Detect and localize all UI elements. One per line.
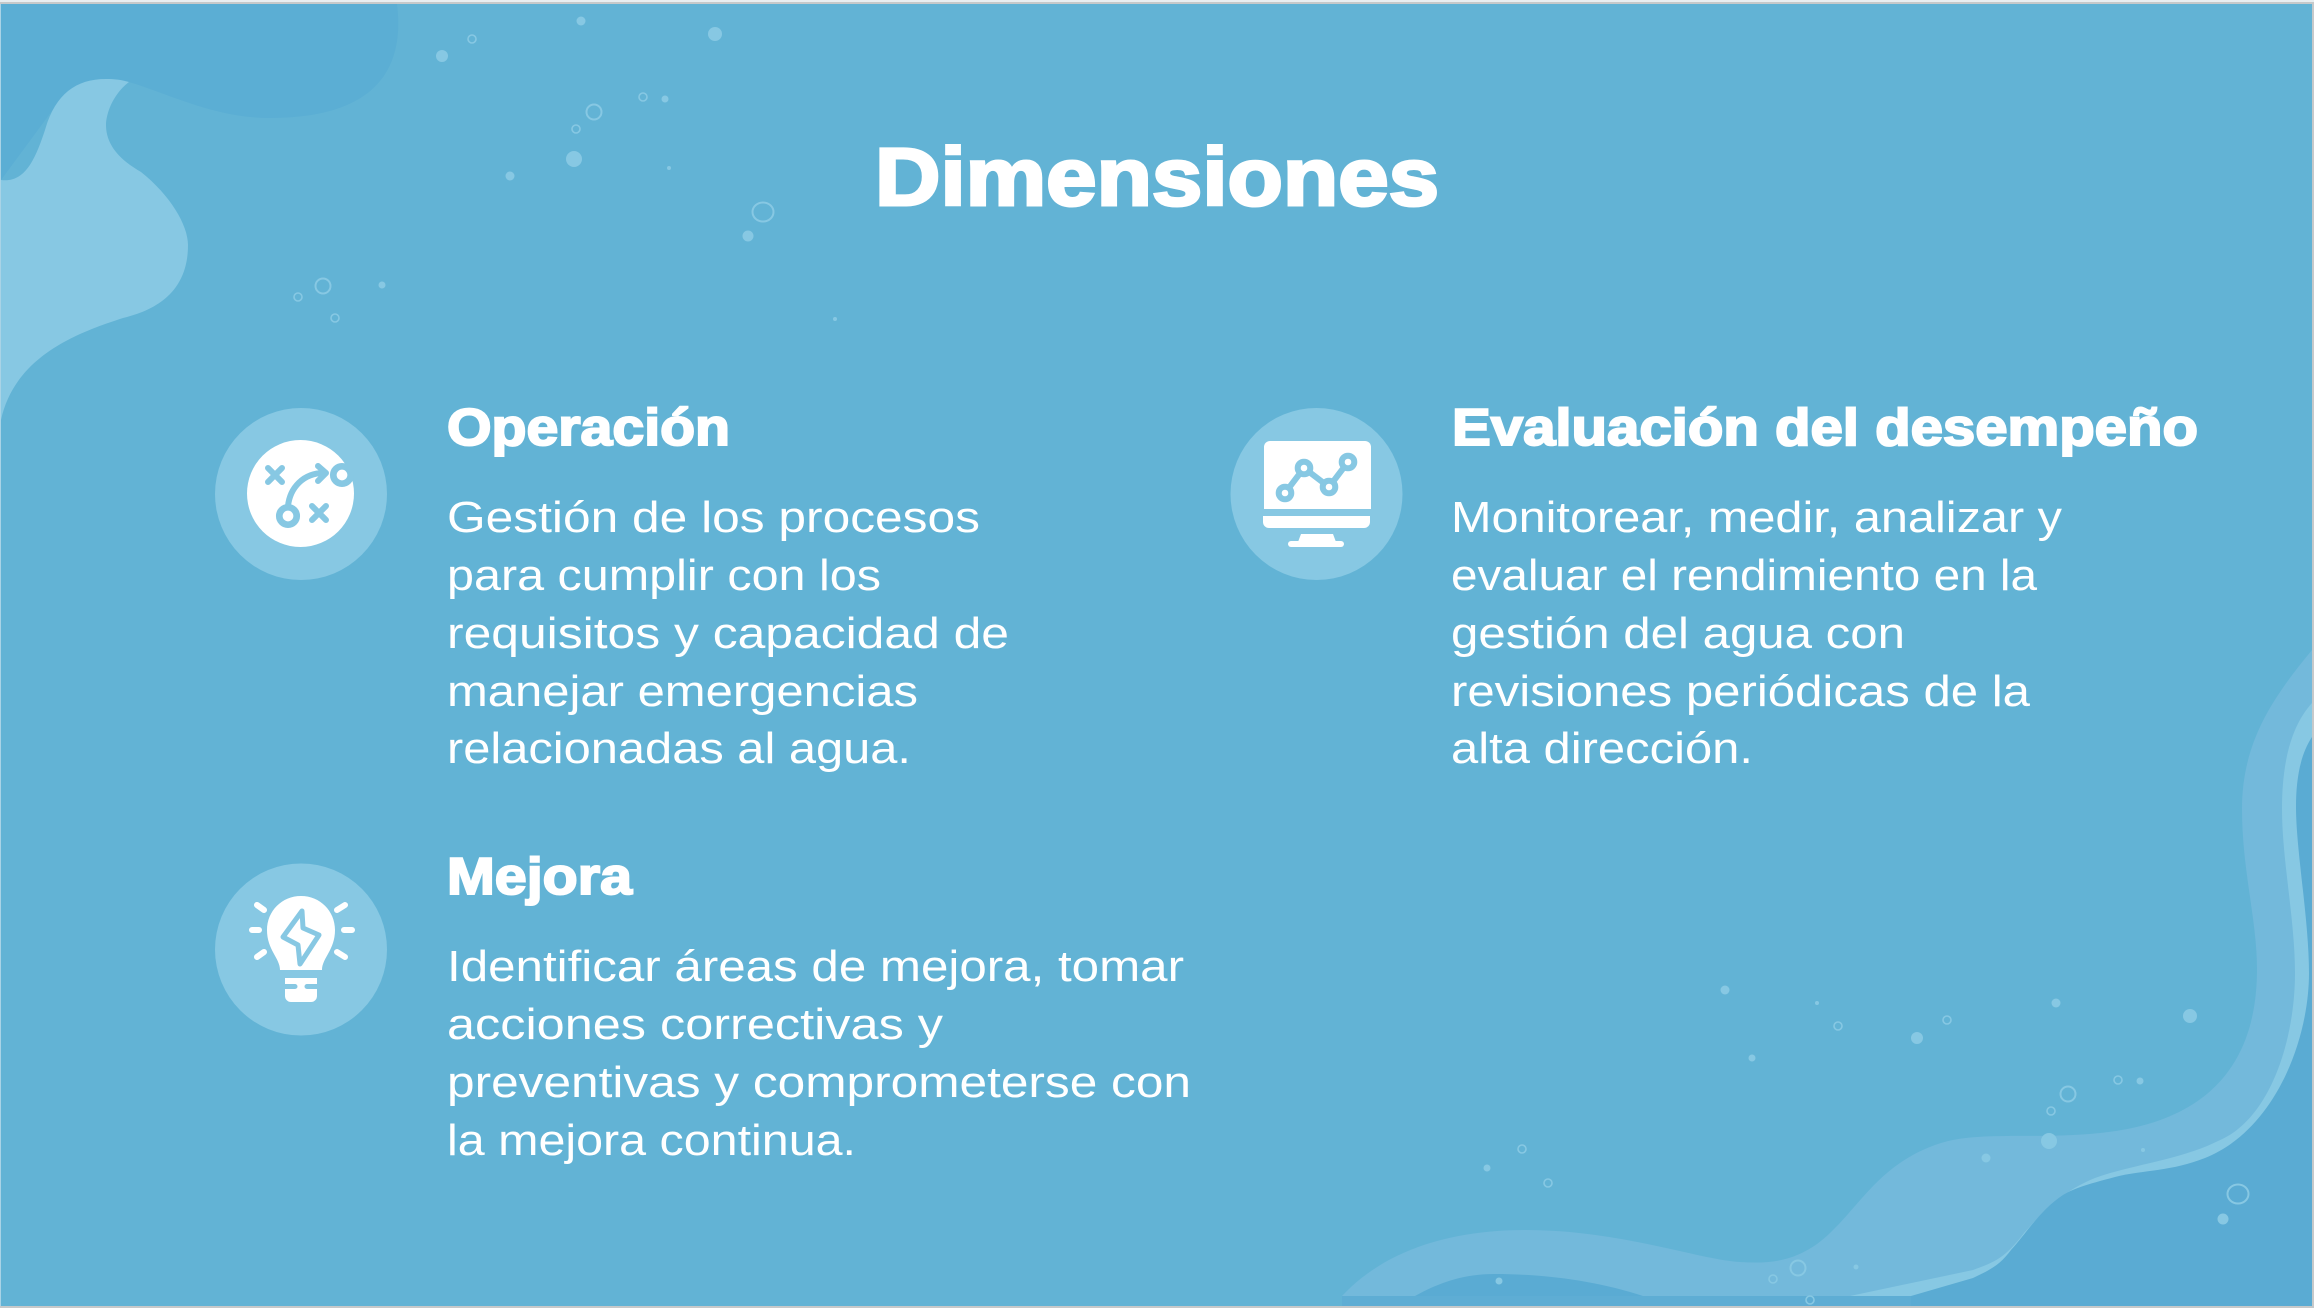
panel: Mejora	[215, 848, 1191, 1165]
text: Operación description: manejar emergencias	[447, 667, 918, 716]
text: Mejora description	[447, 942, 1191, 1165]
text: Evaluación description: gestión del agua con	[1451, 609, 1905, 658]
heading: Mejora: Mejora	[447, 848, 633, 906]
text: Operación description: relacionadas al agua.	[447, 724, 911, 773]
bubbles: top-left cluster	[294, 16, 837, 322]
text: Evaluación description: revisiones periódicas de la	[1451, 667, 2031, 716]
text: Operación description	[447, 493, 1009, 773]
text: Operación description: requisitos y capacidad de	[447, 609, 1009, 658]
panel: Evaluación del desempeño	[1230, 399, 2198, 773]
heading: Evaluación del desempeño: Evaluación del desempeño	[1452, 399, 2198, 457]
panel: Operación	[215, 399, 1009, 773]
text: Mejora description: Identificar áreas de mejora, tomar	[447, 942, 1184, 991]
icon: light bulb with bolt	[215, 864, 387, 1036]
text: Mejora description: acciones correctivas y	[447, 1000, 943, 1049]
wave: top-left corner	[1, 4, 398, 420]
title: Dimensiones	[875, 132, 1439, 223]
text: Mejora description: preventivas y comprometerse con	[447, 1058, 1191, 1107]
text: Operación description: para cumplir con los	[447, 551, 881, 600]
bubbles: bottom-right cluster	[1484, 986, 2248, 1304]
text: Operación description: Gestión de los procesos	[447, 493, 980, 542]
text: Mejora description: la mejora continua.	[447, 1116, 856, 1165]
heading: Operación: Operación	[447, 399, 730, 457]
text: Evaluación description: Monitorear, medir, analizar y	[1451, 493, 2062, 542]
icon: monitor with line chart	[1230, 408, 1402, 580]
wave: bottom-right corner	[1342, 650, 2312, 1306]
icon: strategy play diagram	[215, 408, 387, 580]
text: Evaluación description: alta dirección.	[1451, 724, 1753, 773]
text: Evaluación description	[1451, 493, 2062, 773]
text: Evaluación description: evaluar el rendimiento en la	[1451, 551, 2038, 600]
